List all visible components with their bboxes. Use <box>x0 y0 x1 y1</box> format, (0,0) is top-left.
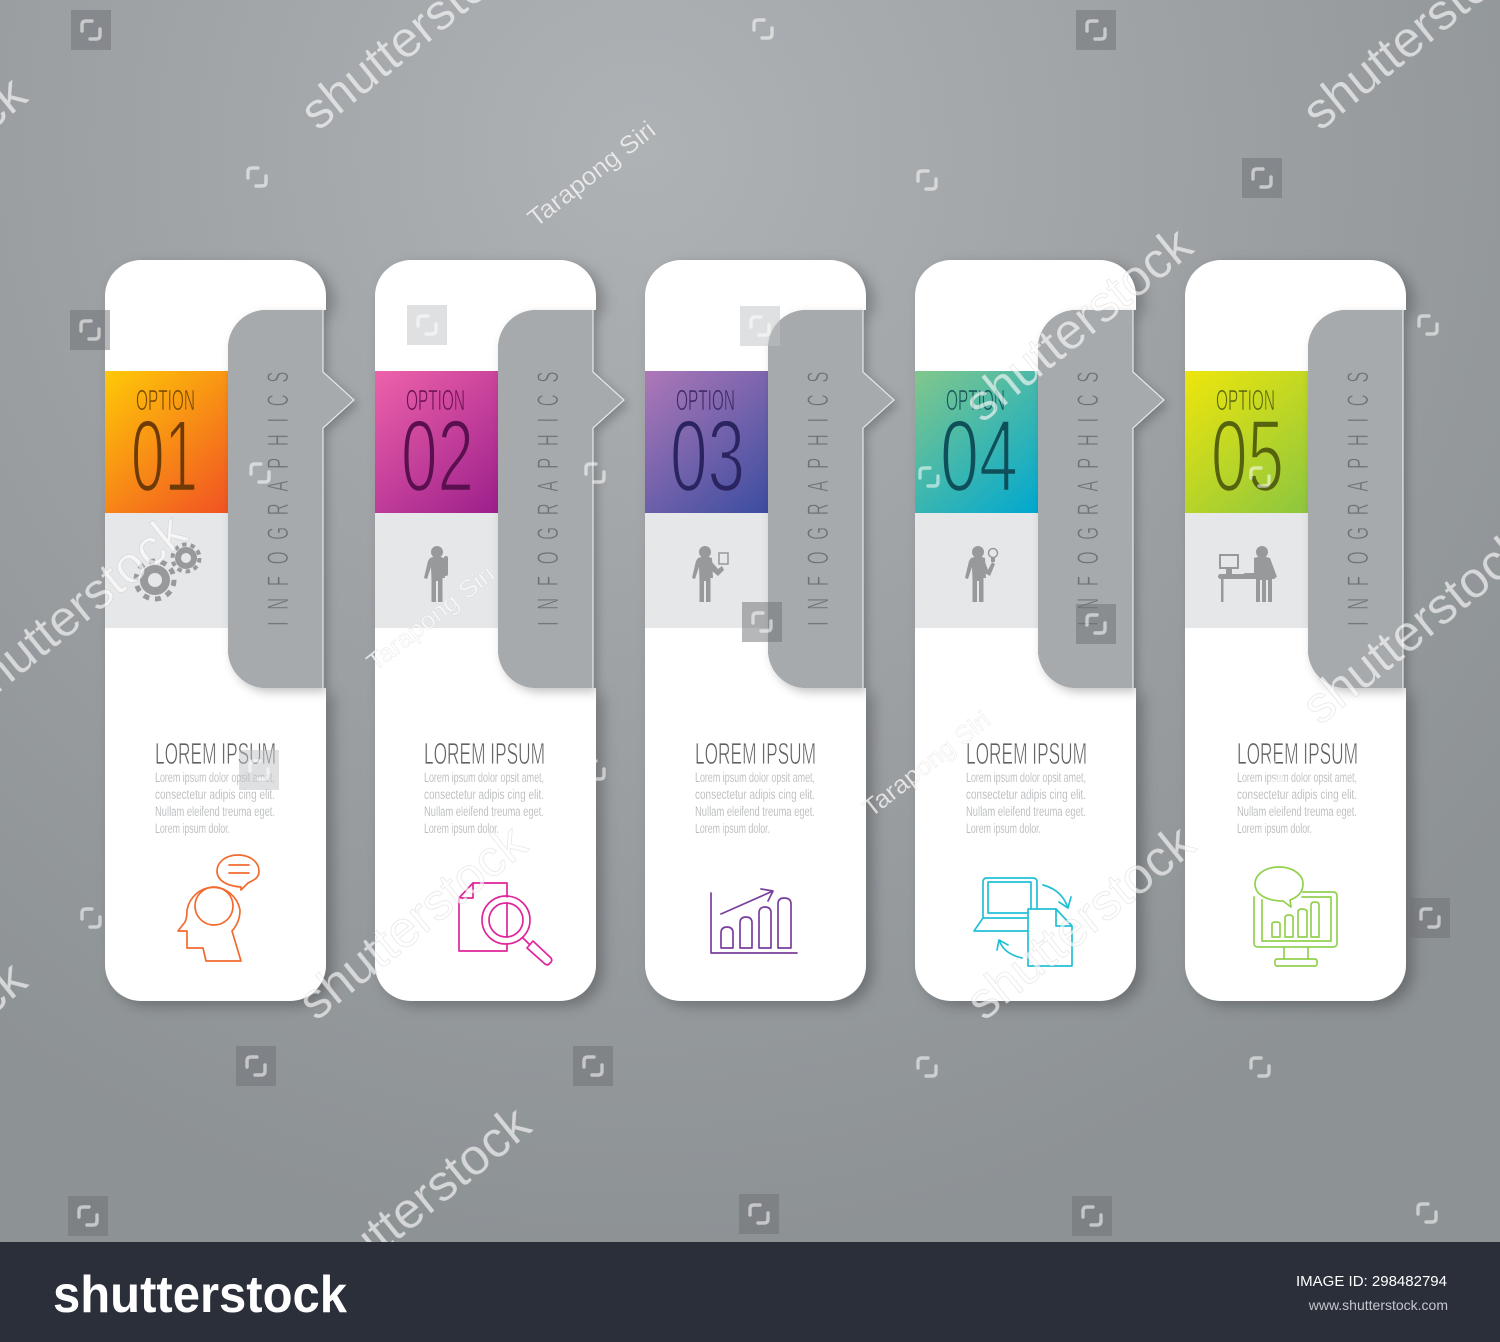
card 5 option label: OPTION <box>1216 385 1275 417</box>
icon: person with light bulb <box>965 546 998 602</box>
watermark text overlays: Tarapong Siri <box>361 560 500 677</box>
card 3 body text: Nullam eleifend treuma eget. <box>695 804 815 819</box>
watermark text overlays: Tarapong Siri <box>857 706 996 823</box>
card 1 heading: LOREM IPSUM <box>155 736 276 771</box>
card 4 option label: OPTION <box>946 385 1005 417</box>
card 3 heading: LOREM IPSUM <box>695 736 816 771</box>
card 4: option 04 <box>915 260 1164 1001</box>
card 5 number: 05 <box>1211 399 1284 513</box>
card 1 side tab <box>228 310 354 688</box>
card 4 side tab <box>1038 310 1164 688</box>
card 2 body text: Nullam eleifend treuma eget. <box>424 804 544 819</box>
icon: laptop and document exchange <box>974 878 1072 966</box>
card 1 grey icon band <box>105 513 228 628</box>
watermark text overlays: shutterstock <box>955 813 1205 1031</box>
card 1 body text: consectetur adipis cing elit. <box>155 787 275 802</box>
card 5 grey icon band <box>1185 513 1308 628</box>
card 3 body text: consectetur adipis cing elit. <box>695 787 815 802</box>
image id: IMAGE ID: 298482794 <box>1296 1273 1447 1290</box>
icon: person at desk with computer <box>1218 546 1277 602</box>
card 2 body text: Lorem ipsum dolor. <box>424 821 499 836</box>
card 4 white panel <box>915 260 1136 1001</box>
card 5 body text: Nullam eleifend treuma eget. <box>1237 804 1357 819</box>
website: www.shutterstock.com <box>1308 1297 1448 1313</box>
card 1: option 01 <box>105 260 354 1001</box>
icon: gears <box>136 544 200 599</box>
card 4 body text: consectetur adipis cing elit. <box>966 787 1086 802</box>
card 4 number: 04 <box>940 399 1018 513</box>
icon: person on phone <box>424 546 448 602</box>
card 4 heading: LOREM IPSUM <box>966 736 1087 771</box>
watermark text overlays: Tarapong Siri <box>522 116 661 233</box>
card 5 vertical label: INFOGRAPHICS <box>1342 360 1375 626</box>
card 5 body text: consectetur adipis cing elit. <box>1237 787 1357 802</box>
card 3 side tab <box>768 310 894 688</box>
card 3 option label: OPTION <box>676 385 735 417</box>
card 4 body text: Nullam eleifend treuma eget. <box>966 804 1086 819</box>
card 2 grey icon band <box>375 513 498 628</box>
footer bar <box>0 1242 1500 1342</box>
card 1 colour band <box>105 371 228 513</box>
footer logo text: shutterstock <box>53 1266 347 1324</box>
watermark text overlays: shutterstock <box>953 215 1203 433</box>
card 3 vertical label: INFOGRAPHICS <box>802 360 835 626</box>
card 2 side tab <box>498 310 624 688</box>
card 3 body text <box>695 770 815 836</box>
card 5 body text <box>1237 770 1357 836</box>
card 2 body text: Lorem ipsum dolor opsit amet, <box>424 770 544 785</box>
card 5 white panel <box>1185 260 1406 1001</box>
card 3: option 03 <box>645 260 894 1001</box>
icon: head with speech bubble <box>178 855 259 961</box>
icon: person holding tablet <box>692 546 728 602</box>
card 5 colour band <box>1185 371 1308 513</box>
card 4 body text: Lorem ipsum dolor. <box>966 821 1041 836</box>
card 2 body text <box>424 770 544 836</box>
card 1 number: 01 <box>131 399 198 513</box>
card 2 white panel <box>375 260 596 1001</box>
card 4 grey icon band <box>915 513 1038 628</box>
card 5: option 05 <box>1185 260 1406 1001</box>
card 3 white panel <box>645 260 866 1001</box>
icon: monitor with chart and speech bubble <box>1254 867 1337 966</box>
watermark text overlays: shutterstock <box>287 813 537 1031</box>
card 3 colour band <box>645 371 768 513</box>
card 3 body text: Lorem ipsum dolor opsit amet, <box>695 770 815 785</box>
card 2 colour band <box>375 371 498 513</box>
card 2 vertical label: INFOGRAPHICS <box>532 360 565 626</box>
card 2 heading: LOREM IPSUM <box>424 736 545 771</box>
card 2 number: 02 <box>401 399 474 513</box>
card 4 body text: Lorem ipsum dolor opsit amet, <box>966 770 1086 785</box>
card 5 body text: Lorem ipsum dolor opsit amet, <box>1237 770 1357 785</box>
card 1 vertical label: INFOGRAPHICS <box>262 360 295 626</box>
icon: document with magnifier <box>459 883 552 965</box>
card 4 colour band <box>915 371 1038 513</box>
card 2 body text: consectetur adipis cing elit. <box>424 787 544 802</box>
card 1 body text: Nullam eleifend treuma eget. <box>155 804 275 819</box>
card 1 body text <box>155 770 275 836</box>
card 3 body text: Lorem ipsum dolor. <box>695 821 770 836</box>
card 5 body text: Lorem ipsum dolor. <box>1237 821 1312 836</box>
icon: rising bar chart <box>711 889 797 953</box>
card 3 number: 03 <box>670 399 745 513</box>
card 2: option 02 <box>375 260 624 1001</box>
card 2 option label: OPTION <box>406 385 465 417</box>
watermark text overlays: shutterstock <box>291 1094 541 1312</box>
card 3 grey icon band <box>645 513 768 628</box>
card 5 heading: LOREM IPSUM <box>1237 736 1358 771</box>
card 1 option label: OPTION <box>136 385 195 417</box>
card 4 body text <box>966 770 1086 836</box>
card 1 body text: Lorem ipsum dolor opsit amet, <box>155 770 275 785</box>
card 5 side tab <box>1308 310 1403 688</box>
card 1 white panel <box>105 260 326 1001</box>
card 4 vertical label: INFOGRAPHICS <box>1072 360 1105 626</box>
card 1 body text: Lorem ipsum dolor. <box>155 821 230 836</box>
